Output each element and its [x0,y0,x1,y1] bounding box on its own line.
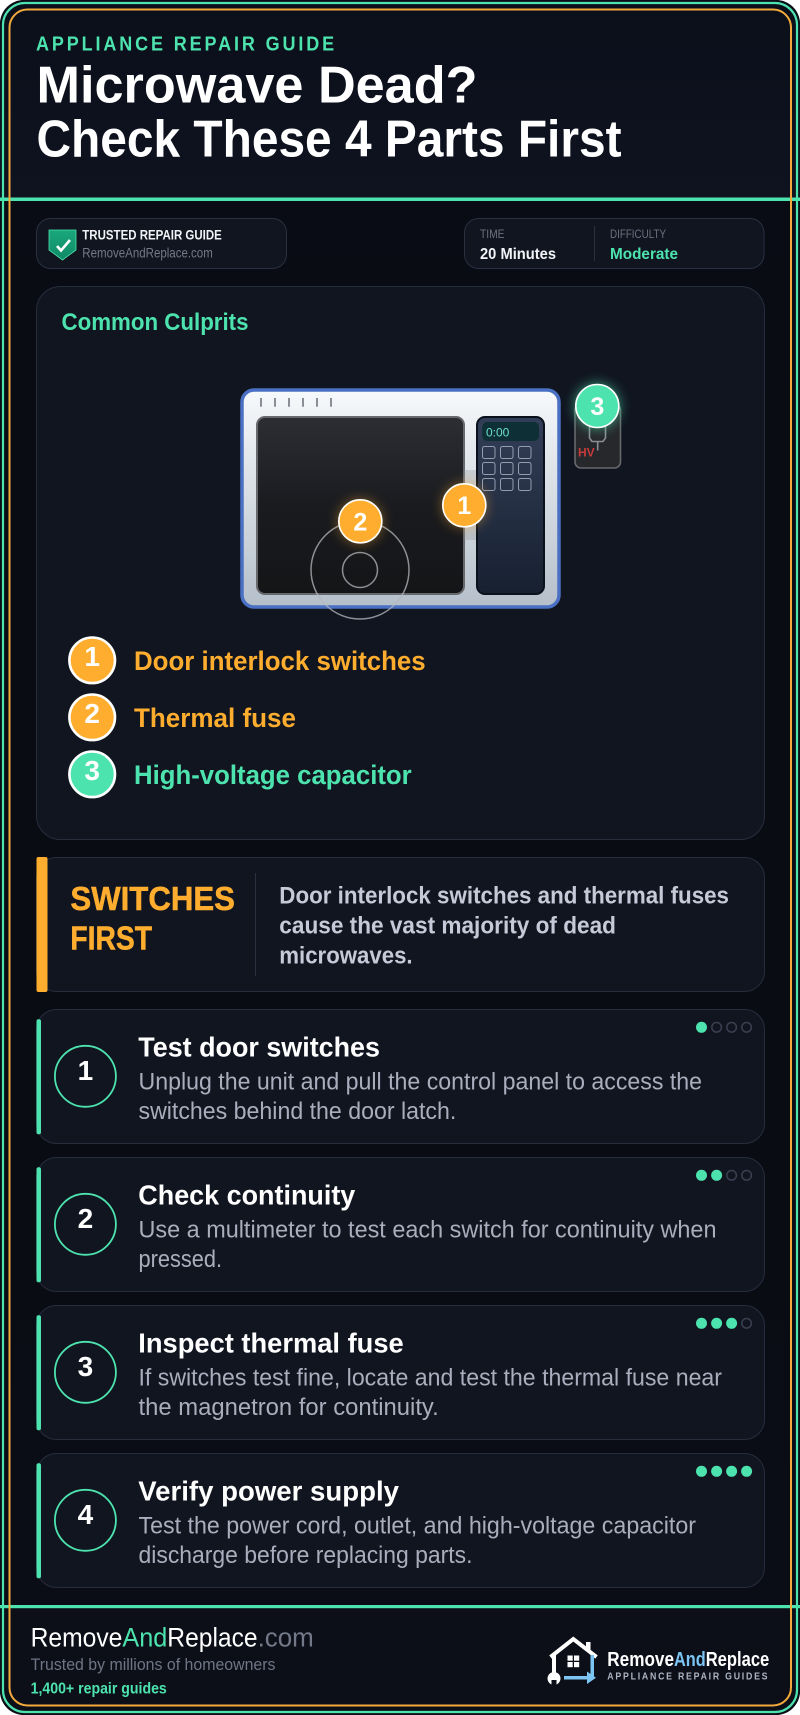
legend item 1 [69,638,426,683]
footer [0,1605,800,1715]
step 3: If switches test fine, locate and test the thermal fuse near [138,1364,722,1391]
legend item 1: 1 [84,641,100,672]
step 2 [36,1158,764,1292]
step 4: Test the power cord, outlet, and high-voltage capacitor [138,1512,696,1539]
turntable [311,521,409,619]
step 3: 3 [78,1351,93,1382]
legend item 2: 2 [84,698,100,729]
callout: switches first [36,857,764,992]
progress dots [696,1466,752,1477]
callout body: cause the vast majority of dead [279,912,616,939]
door window [257,417,464,594]
difficulty: DIFFICULTY [610,227,666,241]
progress dots [696,1022,751,1033]
marker 3: 3 [590,393,604,421]
callout heading: FIRST [70,920,152,957]
capacitor: HV [578,446,595,460]
legend item 3 [69,752,412,797]
door latch [464,470,477,540]
footer brand: Replace [167,1623,258,1653]
step 4 [36,1454,764,1588]
callout heading: SWITCHES [70,881,235,918]
control panel [477,417,544,594]
footer brand [31,1623,314,1653]
step 1: Test door switches [138,1032,380,1063]
icon: house with wrench and arrow [548,1639,596,1686]
progress dots [696,1318,751,1329]
step 4: 4 [78,1499,94,1530]
difficulty: Moderate [610,246,678,263]
marker 1: 1 [457,492,471,520]
footer brand: And [122,1623,167,1653]
heading: Common Culprits [62,309,248,336]
control panel: 0:00 [486,426,510,440]
logo wordmark: Replace [706,1648,769,1671]
time: 20 Minutes [480,246,556,263]
footer count: 1,400+ repair guides [31,1680,167,1697]
step 2: Use a multimeter to test each switch for continuity when [138,1216,716,1243]
badge url: RemoveAndReplace.com [82,246,213,260]
legend item 3: High-voltage capacitor [134,760,412,790]
callout body: Door interlock switches and thermal fuses [279,882,729,909]
logo tagline: APPLIANCE REPAIR GUIDES [607,1672,769,1682]
step 1 [36,1010,764,1144]
eyebrow: APPLIANCE REPAIR GUIDE [36,34,337,56]
footer brand: .com [258,1623,314,1653]
step 2: Check continuity [138,1180,356,1211]
time: TIME [480,227,504,241]
step 3: Inspect thermal fuse [138,1328,404,1359]
logo wordmark [607,1648,769,1671]
badge: trusted repair guide [36,218,286,268]
step 2: pressed. [138,1246,222,1273]
callout body [279,882,729,969]
callout heading [70,881,235,957]
progress dots [696,1170,751,1181]
step 1: 1 [78,1055,93,1086]
step 4: Verify power supply [138,1476,399,1507]
title [36,56,622,168]
badge title: TRUSTED REPAIR GUIDE [82,228,222,243]
legend item 3: 3 [84,755,100,786]
capacitor [575,404,620,468]
title: Microwave Dead? [36,56,478,114]
legend item 2: Thermal fuse [134,703,296,733]
step 3 [36,1306,764,1440]
difficulty [610,227,678,263]
footer brand: Remove [31,1623,122,1653]
time [480,227,556,263]
header divider [0,198,800,201]
step 2: 2 [78,1203,93,1234]
footer tagline: Trusted by millions of homeowners [31,1655,275,1674]
logo wordmark: Remove [607,1648,674,1671]
panel: common culprits [36,286,764,840]
header band [0,0,800,199]
badge: time and difficulty [464,218,764,268]
logo [548,1639,769,1686]
diagram: microwave [242,390,620,619]
legend item 2 [69,694,296,740]
title: Check These 4 Parts First [36,110,622,168]
legend item 1: Door interlock switches [134,646,426,676]
logo wordmark: And [674,1648,706,1671]
step 1: Unplug the unit and pull the control panel to access the [138,1068,702,1095]
marker 3 [575,384,619,428]
step 4: discharge before replacing parts. [138,1542,472,1569]
step 1: switches behind the door latch. [138,1098,456,1125]
callout body: microwaves. [279,942,413,969]
marker 1 [442,483,486,527]
step 3: the magnetron for continuity. [138,1394,439,1421]
marker 2: 2 [353,508,367,536]
icon: shield check [49,230,76,260]
marker 2 [338,499,382,543]
